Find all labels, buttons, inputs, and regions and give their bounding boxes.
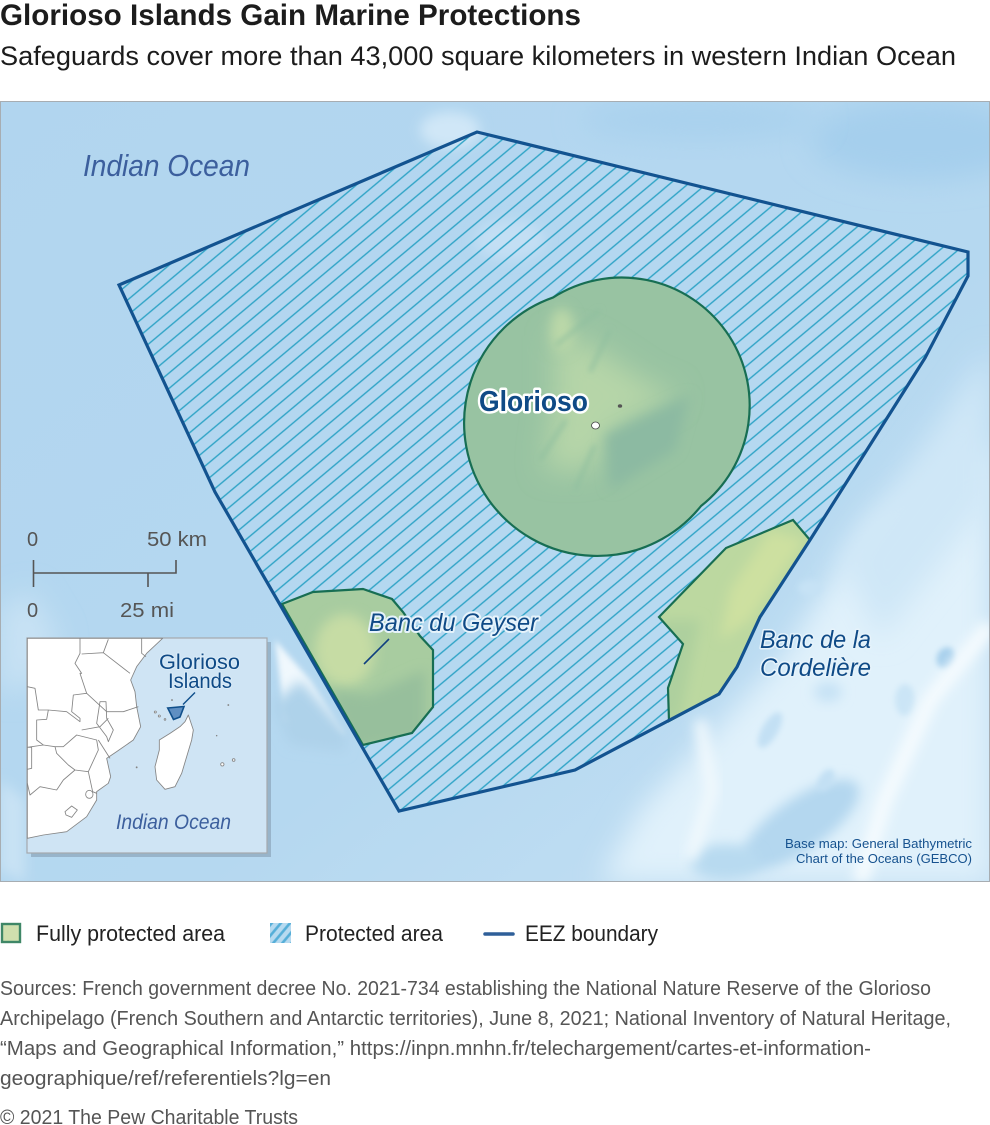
inset label: Glorioso Islands: Glorioso: [159, 651, 240, 674]
map frame: [0, 102, 990, 882]
fully protected area: Banc de la Cordelière: [659, 520, 810, 721]
label: Banc de la Cordelière: Banc de la: [760, 626, 871, 654]
label: Banc de la Cordelière: Cordelière: [760, 654, 871, 682]
protected area hatch: [119, 132, 968, 811]
legend: [2, 921, 658, 946]
sources: Sources: French government decree No. 2021-734 establishing the National Nature Reserve of the Glorioso: [0, 978, 931, 1000]
inset locator map: [27, 638, 271, 857]
base map credit: Chart of the Oceans (GEBCO): [796, 851, 972, 866]
sources: Archipelago (French Southern and Antarctic territories), June 8, 2021; National Inventory of Natural Heritage,: [0, 1008, 951, 1030]
scale bar: 50 km: [147, 529, 207, 551]
leader: Banc du Geyser: [364, 639, 389, 664]
bathymetric base map: [0, 100, 990, 886]
scale bar: 25 mi: [120, 600, 174, 622]
label: Glorioso: Glorioso: [479, 386, 588, 418]
legend: fully protected: Fully protected area: [36, 921, 226, 946]
scale bar: [27, 529, 207, 622]
Madagascar: [155, 715, 193, 789]
inset label: Glorioso Islands: [159, 652, 240, 689]
sources: “Maps and Geographical Information,” https://inpn.mnhn.fr/telechargement/cartes-et-information-: [0, 1038, 871, 1060]
label: Indian Ocean: Indian Ocean: [83, 148, 250, 183]
subtitle: Safeguards cover more than 43,000 square kilometers in western Indian Ocean: [0, 41, 956, 71]
base map credit: Base map: General Bathymetric: [785, 836, 973, 851]
base map credit: [786, 838, 972, 866]
fully protected area: Glorioso: [464, 278, 750, 556]
legend: protected: Protected area: [305, 921, 444, 946]
scale bar: 0: [27, 529, 38, 551]
fully protected area: Banc du Geyser: [282, 589, 433, 750]
EEZ boundary: [119, 132, 968, 811]
sources: [0, 978, 951, 1090]
sources: geographique/ref/referentiels?lg=en: [0, 1068, 331, 1090]
panel: map: [0, 100, 990, 886]
label: Banc de la Cordelière: [759, 629, 871, 678]
icon: Glorioso island: [592, 422, 600, 429]
inset label: Indian Ocean: Indian Ocean: [116, 811, 231, 834]
inset label: Glorioso Islands: Islands: [168, 670, 232, 693]
inset land and borders: [27, 638, 235, 838]
label: Banc du Geyser: Banc du Geyser: [369, 609, 540, 637]
scale bar: 0: [27, 600, 38, 622]
inset EEZ marker: [168, 706, 184, 720]
legend: EEZ boundary: EEZ boundary: [525, 921, 658, 946]
